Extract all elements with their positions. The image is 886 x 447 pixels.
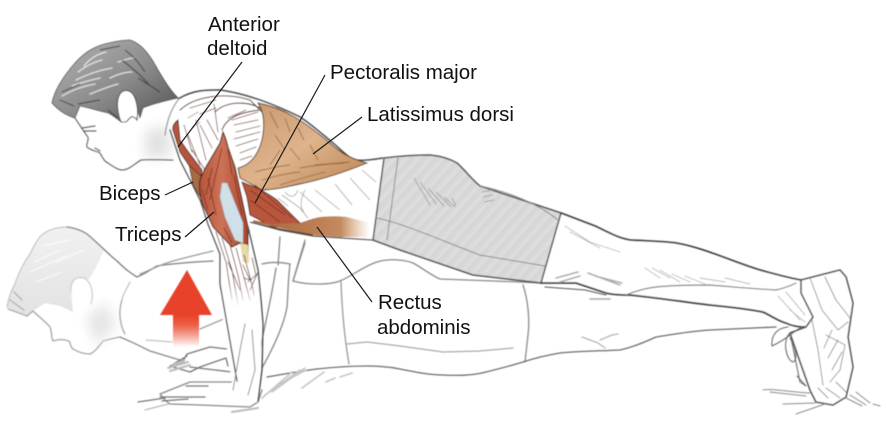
arrow stem: [173, 315, 199, 347]
lower arm: near forearm and hand: [160, 382, 262, 407]
lower body: belly and leg underside: [267, 327, 776, 377]
lower head: hair strands: [30, 240, 84, 282]
upward red arrow: [160, 270, 212, 347]
label: anterior deltoid: deltoid: [207, 37, 267, 60]
lower head: ear: [71, 278, 92, 304]
upper head: face and neck: [75, 90, 178, 170]
muscle: biceps side: [189, 165, 205, 205]
leader line: latissimus dorsi: [313, 117, 362, 154]
upper figure: raised position: [52, 40, 880, 414]
tendon: [220, 183, 243, 243]
upper head: neck shade: [144, 126, 172, 158]
lower leg: knee marks: [582, 334, 618, 348]
shoe laces: [772, 327, 806, 386]
lower body: torso side lines: [293, 240, 305, 281]
upper head: ear: [117, 91, 138, 122]
muscle: anterior deltoid: [173, 120, 202, 183]
leader line: triceps: [185, 212, 214, 237]
upper body: rib hatching: [278, 170, 376, 218]
lower head: back of neck: [67, 227, 213, 277]
label: rectus abdominis: Rectus: [378, 291, 442, 314]
upper body: scapula area hatching: [180, 96, 262, 170]
lower body: waist and back: [293, 260, 542, 284]
lower arm: second arm: [260, 237, 290, 368]
label: rectus abdominis: abdominis: [377, 316, 470, 339]
lower figure: faded starting position: [7, 227, 776, 412]
muscle: upper arm: [200, 132, 249, 263]
label: triceps: Triceps: [115, 223, 181, 246]
label: biceps: Biceps: [99, 182, 161, 205]
arrow head: [160, 270, 212, 315]
upper body: underside line: [250, 222, 373, 240]
muscle: latissimus dorsi: [238, 103, 367, 190]
upper body: shoulder line: [178, 90, 383, 160]
lower body: shorts hem: [523, 285, 529, 362]
lower head: face and neck: [27, 311, 120, 354]
lower arm: floor shadow by hand: [168, 361, 190, 371]
upper leg: knee and calf hatching: [565, 226, 750, 284]
upper arm: forearm outlines and hatching: [170, 130, 263, 401]
label: latissimus dorsi: Latissimus dorsi: [367, 103, 514, 126]
upper head: eye and mouth: [82, 126, 96, 131]
shorts: [373, 155, 561, 283]
label: anterior deltoid: Anterior: [208, 13, 280, 36]
lower head: neck shade: [86, 302, 116, 346]
lower arm: upper hand: [170, 347, 232, 372]
muscle: rectus abdominis: [253, 216, 370, 237]
upper head: hair highlights: [62, 52, 134, 96]
lower arm: floor shadow: [262, 368, 352, 398]
floor shadow under shoe: [763, 389, 880, 414]
leader line: anterior deltoid: [178, 62, 242, 147]
muscle: pectoralis major: [242, 182, 300, 227]
leader line: rectus abdominis: [317, 227, 372, 302]
leader line: biceps: [165, 182, 193, 195]
upper head: hair: [52, 40, 178, 122]
upper leg: outline: [541, 213, 806, 327]
lower body: chest line: [120, 337, 183, 361]
label: pectoralis major: Pectoralis major: [330, 61, 477, 84]
lower head: hair: [7, 227, 104, 316]
shoe: [772, 270, 853, 405]
leader line: pectoralis major: [255, 75, 325, 203]
upper body: white silhouette: [170, 90, 813, 402]
